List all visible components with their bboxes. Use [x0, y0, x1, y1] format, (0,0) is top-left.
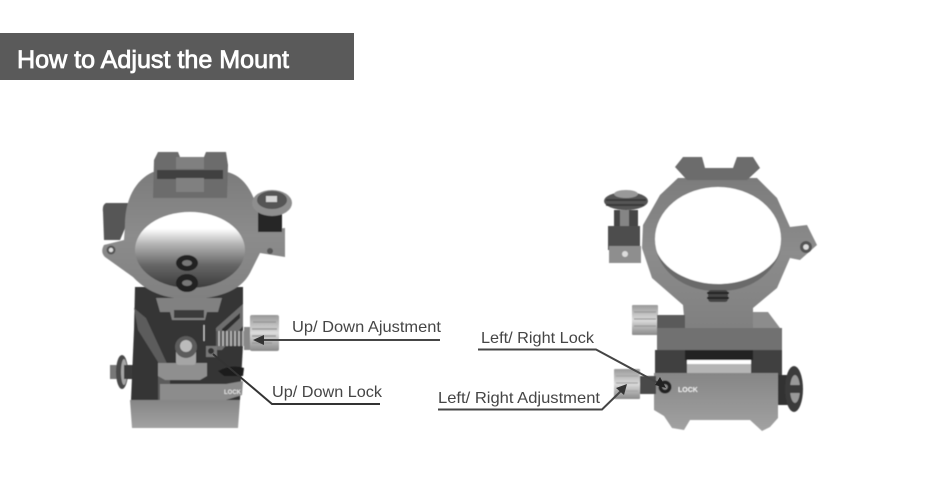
left mount side wheel — [110, 355, 133, 389]
left mount angled rail — [216, 304, 243, 350]
right mount hinge pin — [800, 241, 812, 253]
right mount base block — [655, 328, 782, 375]
right mount lock screw — [658, 380, 672, 394]
title: How to Adjust the Mount — [17, 46, 289, 74]
left mount lower neck block — [156, 298, 222, 320]
label: up/down lock — [213, 354, 383, 404]
label: left/right adjustment: Left/ Right Adjustment — [438, 390, 601, 407]
left mount ring clamp — [102, 172, 285, 299]
left mount lock plate — [160, 381, 243, 400]
label: left/right lock: Left/ Right Lock — [481, 330, 595, 347]
right mount ring clamp — [642, 178, 817, 328]
right mount photo — [604, 157, 817, 431]
label: left/right adjustment — [438, 384, 627, 410]
left mount ring screws — [176, 255, 198, 271]
left mount top rail — [153, 152, 228, 198]
right mount thread post — [707, 290, 729, 302]
left mount photo: LOCK — [224, 390, 242, 396]
left mount photo — [102, 152, 292, 428]
title banner — [0, 33, 354, 80]
left mount adjustment screw — [216, 315, 279, 351]
right mount wheel — [776, 366, 803, 412]
right mount adjustment knob — [614, 369, 656, 399]
left mount hinge pin — [106, 246, 116, 254]
label: up/down adjustment: Up/ Down Ajustment — [292, 319, 442, 336]
arrow: left/right lock — [478, 350, 666, 388]
label: up/down adjustment — [253, 319, 442, 345]
right mount lower slide with LOCK — [654, 373, 778, 431]
arrow: left/right adjustment — [438, 384, 627, 410]
right mount lower slide with LOCK: LOCK — [678, 387, 698, 394]
right mount pedestal wedges — [657, 312, 780, 328]
left mount small lock screw — [206, 346, 217, 357]
left mount engraved scale — [203, 325, 205, 341]
left mount dark body — [131, 287, 243, 400]
left mount base block — [130, 400, 240, 428]
left mount pivot screw — [175, 336, 197, 358]
right mount top rail — [675, 157, 760, 180]
left mount thumb knob — [252, 190, 292, 232]
label: left/right lock — [478, 330, 666, 388]
label: up/down lock: Up/ Down Lock — [272, 384, 383, 401]
left mount lock lever — [218, 367, 244, 376]
arrow: up/down adjustment — [253, 335, 440, 345]
right mount upper knob — [632, 305, 658, 335]
arrow: up/down lock — [213, 354, 380, 404]
right mount side knob — [604, 190, 648, 263]
left mount pivot block — [158, 363, 207, 380]
